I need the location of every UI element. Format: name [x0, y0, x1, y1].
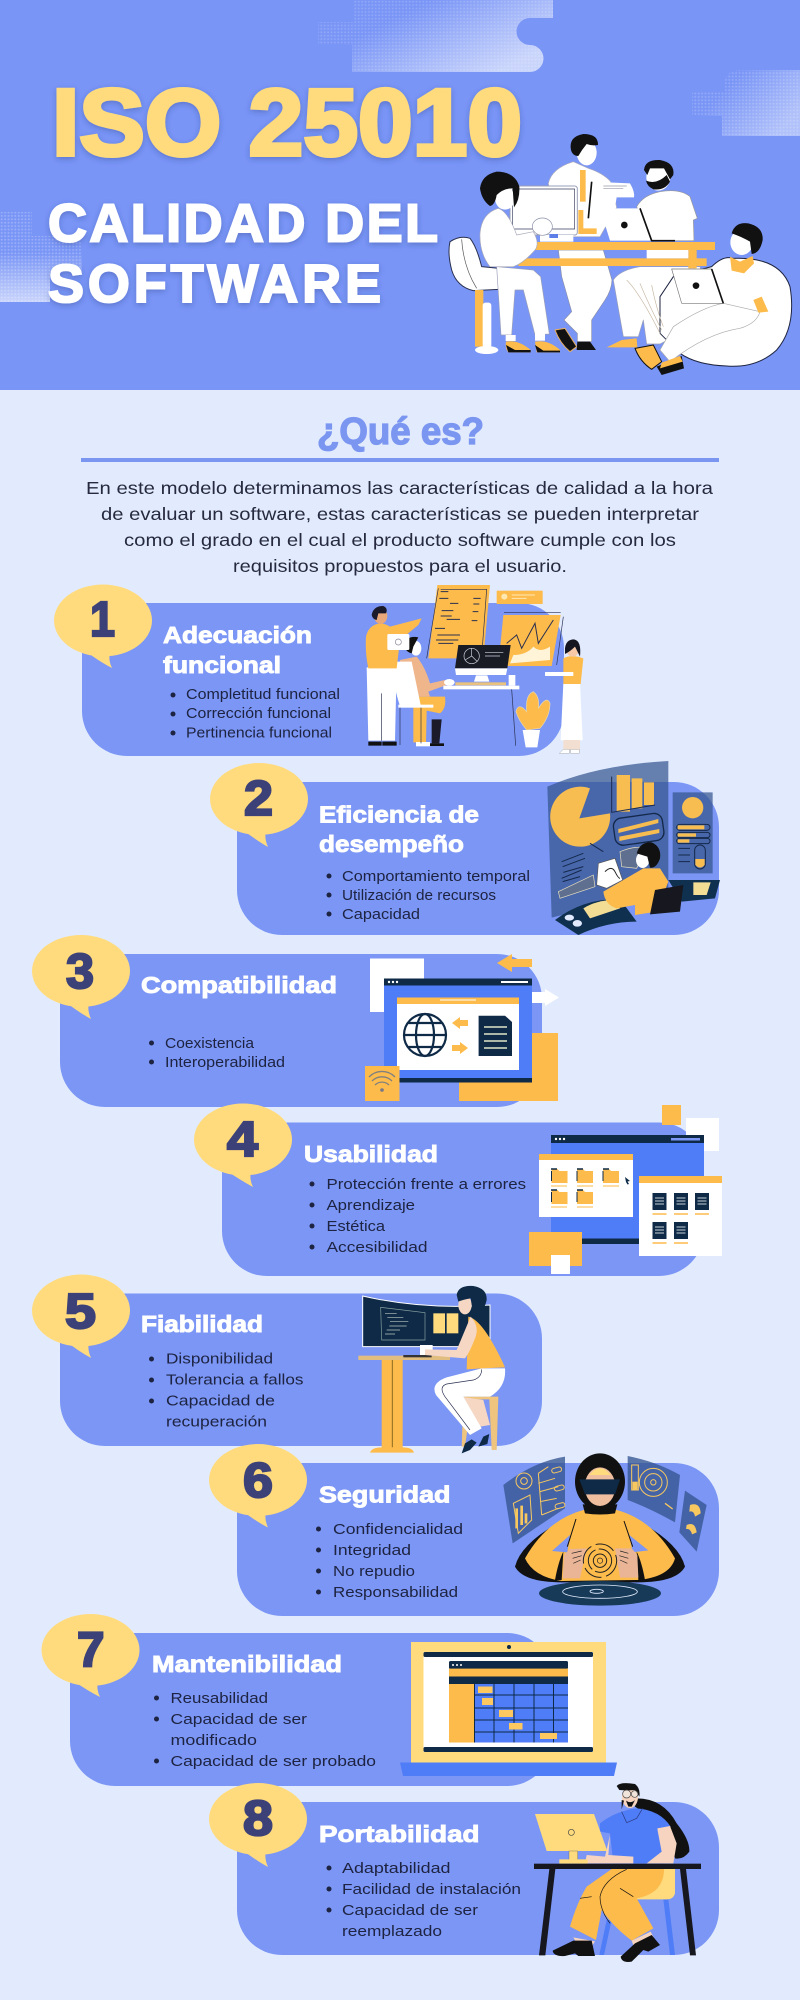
- list 7: Capacidad de ser probado: [170, 1754, 376, 1770]
- list 7: Capacidad de ser: [170, 1712, 307, 1728]
- list 4: Accesibilidad: [326, 1240, 428, 1256]
- heading 2: Eficiencia de: [319, 802, 479, 828]
- monitor and desk: [443, 645, 519, 746]
- number bubble 8: 8: [243, 1792, 273, 1846]
- list 8: [326, 1861, 521, 1940]
- list 8: Adaptabilidad: [342, 1861, 450, 1877]
- list 6: [316, 1522, 463, 1601]
- panel: 2 Eficiencia de desempeño: [210, 761, 720, 935]
- heading 1: Adecuación: [163, 622, 312, 648]
- list 5: Tolerancia a fallos: [166, 1372, 304, 1388]
- list 3: Coexistencia: [165, 1036, 255, 1052]
- list 2: [326, 869, 530, 923]
- illustration: analyst at control panel: [547, 761, 720, 935]
- number bubble 5: [32, 1274, 130, 1358]
- panel: 7 Mantenibilidad: [42, 1614, 617, 1786]
- list 5: [149, 1352, 304, 1430]
- heading 3: Compatibilidad: [141, 972, 337, 998]
- number bubble 2: [210, 763, 308, 847]
- woman with tray: [545, 639, 583, 753]
- list 5: recuperación: [166, 1414, 267, 1430]
- illustration: file windows: [529, 1105, 722, 1274]
- number bubble 4: 4: [227, 1113, 258, 1167]
- list 6: No repudio: [333, 1564, 415, 1580]
- list 6: Responsabilidad: [333, 1585, 458, 1601]
- subtitle: SOFTWARE: SOFTWARE: [48, 254, 381, 314]
- list 7: Reusabilidad: [170, 1691, 268, 1707]
- plant: [516, 692, 550, 747]
- chair: [449, 237, 520, 354]
- heading 2: desempeño: [319, 831, 464, 857]
- list 1: Pertinencia funcional: [186, 726, 332, 742]
- list 3: Interoperabilidad: [165, 1055, 285, 1071]
- window: folders: [539, 1154, 633, 1217]
- paper: [588, 182, 634, 218]
- laptop: [600, 208, 675, 241]
- list 8: Capacidad de ser: [342, 1903, 478, 1919]
- panel: 5 Fiabilidad: [32, 1274, 542, 1453]
- panel: 1 Adecuación funcional: [54, 584, 583, 756]
- standing man: [366, 606, 422, 746]
- bean bag with seated person: [627, 223, 792, 375]
- number bubble 7: [42, 1614, 140, 1697]
- number bubble 2: 2: [244, 772, 273, 826]
- list 2: Comportamiento temporal: [342, 869, 530, 885]
- table: [518, 242, 715, 268]
- list 5: Capacidad de: [166, 1394, 275, 1410]
- number bubble 1: 1: [90, 593, 115, 647]
- list 4: Estética: [326, 1219, 386, 1235]
- subtitle: CALIDAD DEL: CALIDAD DEL: [48, 194, 438, 254]
- intro paragraph: [86, 478, 713, 576]
- intro paragraph: de evaluar un software, estas características se pueden interpretar: [101, 504, 699, 524]
- panel: 3 Compatibilidad: [32, 935, 559, 1107]
- bearded man legs: [607, 160, 707, 347]
- heading: ¿Qué es?: ¿Qué es?: [317, 411, 484, 453]
- cloud: top: [318, 0, 553, 72]
- illustration: woman at computer: [534, 1783, 701, 1962]
- number bubble 6: 6: [243, 1454, 273, 1508]
- illustration: hooded figure with fingerprint: [503, 1453, 707, 1606]
- illustration: woman at desk: [358, 1286, 505, 1453]
- number bubble 3: [32, 935, 130, 1019]
- list 4: Protección frente a errores: [326, 1177, 526, 1193]
- seated woman: [480, 172, 560, 352]
- list 3: [149, 1036, 285, 1071]
- list 7: modificado: [170, 1733, 257, 1749]
- list 1: Corrección funcional: [186, 706, 331, 722]
- list 6: Confidencialidad: [333, 1522, 463, 1538]
- number bubble 5: 5: [65, 1285, 96, 1339]
- heading 5: Fiabilidad: [141, 1311, 263, 1337]
- intro paragraph: como el grado en el cual el producto software cumple con los: [124, 530, 676, 550]
- list 7: [154, 1691, 376, 1770]
- panel: 6 Seguridad: [209, 1444, 719, 1616]
- window: documents: [639, 1176, 722, 1256]
- illustration: browser with globe: [365, 954, 559, 1101]
- number bubble 8: [209, 1783, 307, 1867]
- number bubble 7: 7: [77, 1624, 104, 1678]
- list 1: Completitud funcional: [186, 687, 340, 703]
- list 6: Integridad: [333, 1543, 411, 1559]
- list 2: Capacidad: [342, 907, 420, 923]
- heading 1: [163, 622, 312, 678]
- number bubble 6: [209, 1444, 307, 1528]
- number bubble 3: 3: [66, 945, 94, 999]
- heading 1: funcional: [163, 652, 281, 678]
- list 4: [310, 1177, 526, 1256]
- heading 8: Portabilidad: [319, 1821, 480, 1847]
- number bubble 1: [54, 584, 152, 668]
- list 8: Facilidad de instalación: [342, 1882, 521, 1898]
- list 8: reemplazado: [342, 1924, 442, 1940]
- monitor: [510, 186, 577, 242]
- icon: globe: [404, 1014, 446, 1056]
- list 4: Aprendizaje: [326, 1198, 415, 1214]
- heading 2: [319, 802, 479, 857]
- heading 6: Seguridad: [319, 1482, 450, 1508]
- heading 7: Mantenibilidad: [152, 1651, 342, 1677]
- heading 4: Usabilidad: [304, 1141, 438, 1167]
- list 2: Utilización de recursos: [342, 888, 496, 904]
- intro paragraph: En este modelo determinamos las características de calidad a la hora: [86, 478, 713, 498]
- illustration: developers at dashboards: [366, 585, 583, 753]
- seated developer: [392, 637, 455, 746]
- illustration: team at work: [449, 134, 792, 375]
- number bubble 4: [194, 1104, 292, 1187]
- panel: 4 Usabilidad: [194, 1104, 722, 1276]
- header band: [0, 0, 800, 390]
- list 1: [170, 687, 340, 742]
- title: ISO 25010: ISO 25010: [52, 70, 522, 176]
- standing man: [548, 134, 617, 352]
- panel: 8 Portabilidad: [209, 1783, 719, 1962]
- icon: wifi tile: [365, 1066, 400, 1101]
- cloud: left: [0, 212, 82, 302]
- list 5: Disponibilidad: [166, 1352, 273, 1368]
- cloud: right: [692, 70, 800, 136]
- illustration: laptop with calendar: [400, 1642, 617, 1776]
- intro paragraph: requisitos propuestos para el usuario.: [233, 556, 567, 576]
- divider rule: [81, 458, 719, 462]
